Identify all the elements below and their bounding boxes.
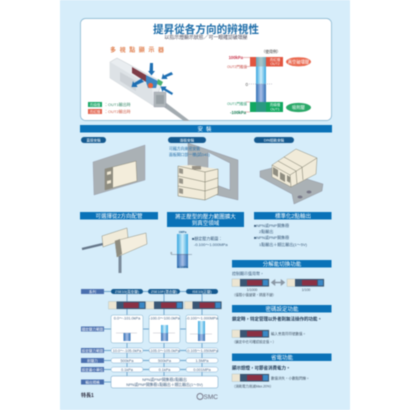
series names: [111, 289, 218, 294]
label: DIN mounting: DIN鋁軌安裝: [264, 138, 285, 142]
text: outputs: 2點輸出: [259, 228, 273, 234]
subtitle: 以指示燈顯示狀態／可一眼確認破壞壓: [164, 34, 248, 41]
label: direct mounting: 直接安裝: [86, 138, 101, 142]
text: outputs: 1點輸出＋類比輸出(1～5V): [259, 241, 308, 247]
text: rated pressure range: [192, 235, 228, 247]
legend: OUT2: 亮紅燈: [90, 109, 101, 114]
row: set pressure range: 10.0～-105.0kPa: [113, 349, 142, 353]
gauge: pressure range: OUT2門檻值: [227, 64, 247, 69]
row: output spec: [111, 376, 218, 388]
chart: ZSE10F: -100.0～100.0kPa: [149, 316, 181, 320]
background panel: [60, 0, 350, 410]
row: set pressure range: -105.0～105.0kPa: [149, 349, 181, 353]
text: outputs: [254, 222, 308, 247]
row labels: 系列: [89, 289, 96, 294]
heading bar: mounting: [80, 125, 332, 133]
gauge: rated pressure range: -0.1MPa: [177, 265, 188, 269]
heading: resolution switching: [232, 260, 332, 268]
heading: standard 2 outputs: [254, 212, 332, 220]
row: minimum unit: 0.1kPa: [159, 368, 171, 372]
heading: standard 2 outputs: 標準化2點輸出: [275, 212, 311, 220]
gauge: pressure range: 亮綠燈: [270, 102, 281, 107]
illustration: panel mounting: [178, 143, 238, 200]
row labels: 耐壓力: [87, 358, 98, 363]
panel: multi-view display: [80, 18, 332, 121]
text and display: power saving: [232, 364, 310, 388]
row: output spec: NPN或PNP開集極1點輸出＋類比輸出(1～5V): [126, 382, 204, 387]
text and display: power saving: 顯示熄燈，可節省消費電力。: [232, 364, 290, 372]
heading: key lock: 密碼設定功能: [265, 305, 299, 313]
callout: suction: 吸附壓: [292, 104, 306, 111]
row labels: 設定壓力範圍: [82, 348, 104, 353]
row labels: [81, 289, 104, 384]
row labels: 額定壓力範圍: [82, 326, 104, 332]
gauge: rated pressure range: [170, 230, 192, 269]
row: proof pressure: 500kPa: [121, 359, 134, 363]
legend: OUT2: ：OUT2輸出時: [104, 108, 131, 114]
text and display: power saving: （消耗電力削減Max.20%）: [232, 384, 273, 388]
note: panel mounting: 可藉方向來密安裝: [169, 146, 200, 151]
text and displays: resolution: 1/1000: [247, 288, 257, 292]
text and displays: resolution: 1/100: [302, 288, 310, 292]
chart: ZSE10: 0.0～-101.0kPa: [114, 316, 141, 320]
heading: expanded range: [167, 212, 244, 227]
label: DIN mounting: [254, 137, 294, 143]
row: proof pressure: 500kPa: [158, 359, 172, 363]
text: outputs: ■NPN或PNP開集極: [254, 234, 289, 240]
row: proof pressure: [111, 358, 218, 363]
logo: SMC: [197, 394, 218, 401]
text and display: key lock: [232, 316, 322, 344]
gauge: pressure range: （使用例）: [262, 49, 280, 54]
gauge: pressure range: OUT1: [270, 108, 280, 112]
displays: [108, 302, 222, 309]
row labels: 設定最小單位: [82, 367, 104, 372]
chart: ISE10: -0.100～1.000MPa: [186, 316, 219, 320]
legend: OUT1: 亮綠燈: [90, 102, 101, 107]
note: panel mounting: [169, 146, 211, 157]
row: minimum unit: 0.001MPa: [193, 368, 212, 372]
series names: ZSE10(真空壓): [115, 289, 139, 294]
arrow: switching: [272, 280, 284, 284]
text: rated pressure range: -0.100～1.000MPa: [194, 242, 228, 247]
gauge: rated pressure range: 1MPa: [179, 230, 187, 234]
chart: ISE10: [186, 315, 219, 343]
text: outputs: ■NPN或PNP開集極: [254, 222, 289, 228]
row: output spec: NPN或PNP開集極2點輸出: [142, 377, 187, 382]
row: proof pressure: 1.5MPa: [195, 359, 209, 363]
text and displays: resolution: （僅限小值變更，精度不變）: [232, 292, 276, 297]
legend: OUT1: [88, 101, 131, 107]
label: direct mounting: [81, 137, 106, 143]
heading: resolution switching: 分解能切換功能: [263, 260, 302, 268]
illustration: DIN mounting: [260, 149, 323, 204]
callout: vacuum: 真空破壞壓: [288, 58, 310, 66]
label: panel mounting: [168, 137, 206, 143]
gauge: pressure range: 0: [245, 82, 248, 87]
heading: two-direction piping: 可選擇從2方向配管: [95, 212, 143, 220]
illustration: piping: [82, 228, 147, 273]
label: panel mounting: 面板安裝: [180, 138, 195, 142]
heading: multi-view display: 多視點顯示器: [110, 46, 168, 54]
gauge: pressure range: OUT2: [270, 62, 280, 66]
legend: OUT2: [88, 108, 131, 114]
text and displays: resolution: 控制顯示值用幣，: [232, 270, 264, 276]
icon: sensor illustration: [110, 58, 190, 121]
legend: OUT1: ：OUT1輸出時: [104, 101, 131, 107]
note: panel mounting: 面板開口部一樣(試D41): [169, 152, 211, 157]
gauge: pressure range: 亮紅燈: [270, 57, 281, 62]
heading: two-direction piping: [80, 212, 158, 220]
gauge: pressure range: [227, 49, 283, 115]
illustration: direct mounting: [93, 145, 145, 195]
gauge: pressure range: OUT1門檻值: [227, 101, 247, 106]
row labels: 輸出規格: [85, 380, 100, 384]
heading bar: mounting: 安裝: [197, 125, 215, 133]
footer: feature number: 特長1: [81, 392, 94, 399]
text: rated pressure range: ■額定壓力範圍：: [192, 235, 222, 241]
series names: ZSE10F(混合壓): [151, 289, 177, 294]
text and display: key lock: 輸入會員符符號數值。: [271, 331, 306, 336]
text and display: power saving: 數值消失，小數點閃爍。: [271, 376, 310, 380]
chart: ZSE10F: [149, 315, 181, 343]
row: minimum unit: [111, 367, 218, 372]
title: 提昇從各方向的辨視性: [153, 23, 259, 36]
row: minimum unit: 0.1kPa: [121, 368, 134, 372]
text and display: key lock: （鎖定中也可確認設定值。）: [232, 339, 276, 344]
gauge: pressure range: 100kPa: [229, 55, 244, 60]
table: series comparison: [81, 289, 222, 388]
logo: SMC: SMC: [204, 394, 218, 401]
heading: expanded range: 將正壓型的壓力範圍擴大: [175, 212, 236, 220]
chart: ZSE10: [111, 315, 143, 343]
gauge: pressure range: -100kPa: [230, 110, 247, 115]
text and displays: resolution: [232, 270, 324, 297]
heading: key lock: [232, 305, 332, 313]
row: set pressure range: [111, 348, 219, 353]
arrows: view directions: [132, 63, 173, 95]
heading: power saving: 省電功能: [271, 354, 293, 362]
heading: power saving: [232, 354, 332, 362]
text and display: key lock: 鎖定時，特定管理以外者則無法操作的功能。: [232, 316, 322, 322]
heading: expanded range: 到真空領域: [192, 219, 220, 227]
callout: vacuum: [286, 57, 311, 66]
series names: ISE10(正壓): [192, 289, 212, 294]
gauge: rated pressure range: 0: [170, 251, 172, 255]
row: set pressure range: -0.105～1.050MPa: [186, 349, 219, 353]
callout: suction: [286, 103, 311, 112]
